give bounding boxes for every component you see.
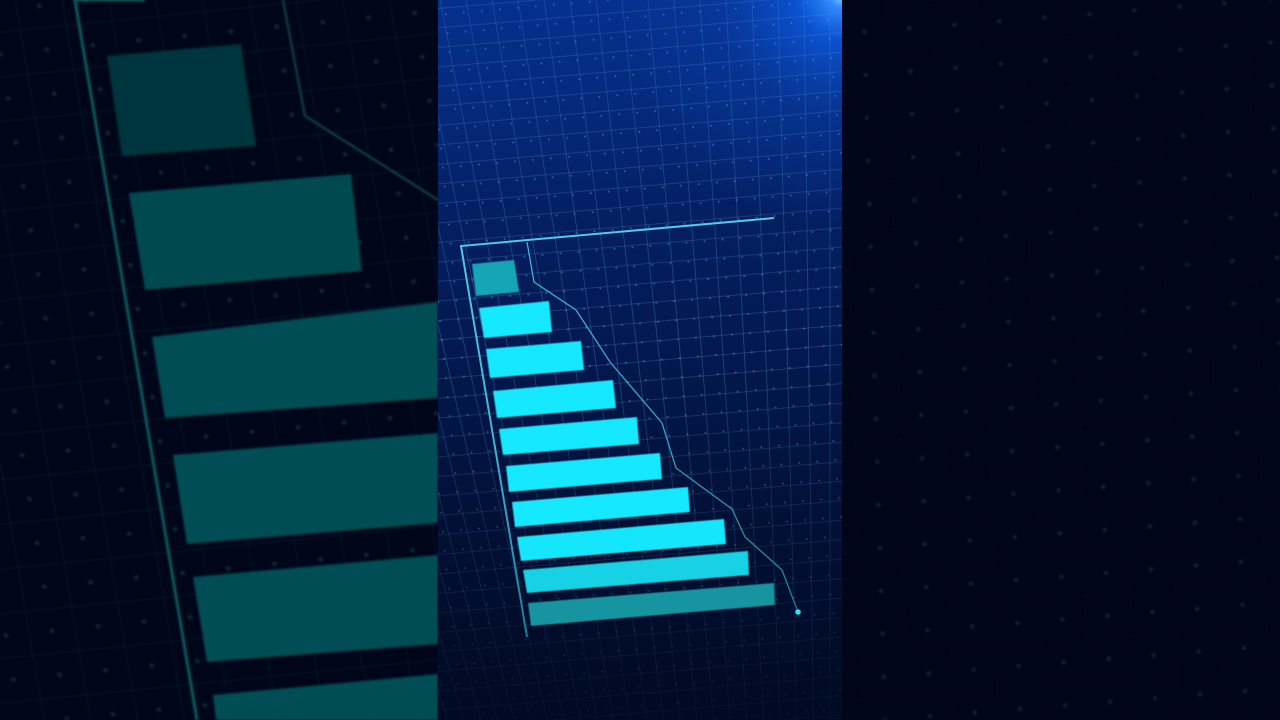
bar chart	[472, 260, 775, 626]
panel: right dark grid background	[842, 0, 1280, 720]
bar 1	[472, 260, 519, 296]
bar 3	[486, 341, 584, 378]
bar 7	[512, 487, 690, 527]
left panel enlarged bars	[107, 44, 438, 720]
bar 2	[479, 301, 552, 338]
trend line end marker	[795, 609, 801, 615]
left panel trend line	[283, 0, 438, 200]
central gradient background	[438, 0, 842, 720]
bar 10	[528, 583, 775, 626]
bar 5	[499, 417, 639, 455]
chart axis line	[461, 218, 774, 637]
bar 9	[523, 551, 749, 593]
panel: central blue chart	[438, 0, 842, 720]
bar 6	[506, 453, 662, 492]
panel: blurred left enlargement	[0, 0, 438, 720]
bar 8	[517, 519, 726, 561]
bar 4	[493, 380, 616, 418]
perspective grid	[438, 0, 842, 720]
left panel chart axis line	[75, 0, 197, 720]
corner light glow	[674, 0, 842, 188]
trend line	[527, 242, 798, 612]
